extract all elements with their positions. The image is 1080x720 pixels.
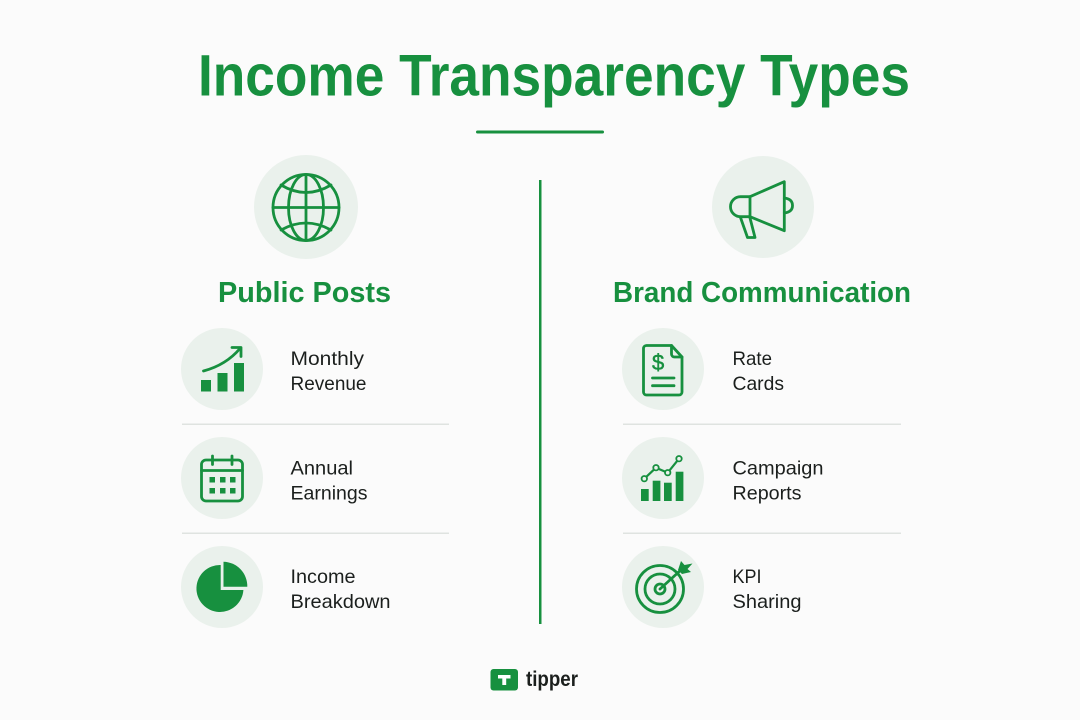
icon: invoice document — [622, 328, 704, 410]
icon: calendar — [181, 437, 263, 519]
title: Income Transparency Types — [198, 44, 910, 108]
icon: target with arrow — [622, 546, 704, 628]
icon: pie chart — [181, 546, 263, 628]
title underline — [476, 130, 604, 134]
center vertical divider — [539, 180, 542, 624]
label: annual earnings: Earnings — [290, 482, 368, 504]
label: kpi sharing: KPI — [732, 566, 762, 588]
label: monthly revenue: Monthly — [290, 348, 364, 370]
logo: tipper — [490, 668, 578, 691]
heading: brand communication: Brand Communication — [613, 277, 911, 309]
icon: globe — [254, 155, 358, 259]
heading: public posts: Public Posts — [218, 277, 391, 309]
icon: megaphone — [712, 156, 814, 258]
icon: logo mark — [490, 669, 518, 690]
row: monthly revenue — [181, 328, 366, 410]
label: rate cards: Cards — [732, 373, 784, 395]
label: campaign reports: Campaign — [732, 458, 824, 480]
row: income breakdown — [181, 546, 390, 628]
label: income breakdown: Breakdown — [290, 591, 390, 613]
icon: invoice document: $ — [652, 350, 664, 375]
wordmark: tipper — [526, 668, 578, 691]
row: kpi sharing — [622, 546, 802, 628]
icon: rising bar chart — [181, 328, 263, 410]
label: income breakdown: Income — [290, 566, 356, 588]
icon: bars with trend line — [622, 437, 704, 519]
label: annual earnings: Annual — [290, 458, 353, 480]
label: monthly revenue: Revenue — [290, 373, 366, 395]
label: kpi sharing: Sharing — [732, 591, 802, 613]
row: rate cards — [622, 328, 784, 410]
panel: public posts — [181, 155, 449, 628]
label: rate cards: Rate — [732, 348, 772, 370]
row: annual earnings — [181, 437, 368, 519]
row: campaign reports — [622, 437, 824, 519]
label: campaign reports: Reports — [732, 482, 802, 504]
panel: brand communication — [613, 156, 911, 628]
